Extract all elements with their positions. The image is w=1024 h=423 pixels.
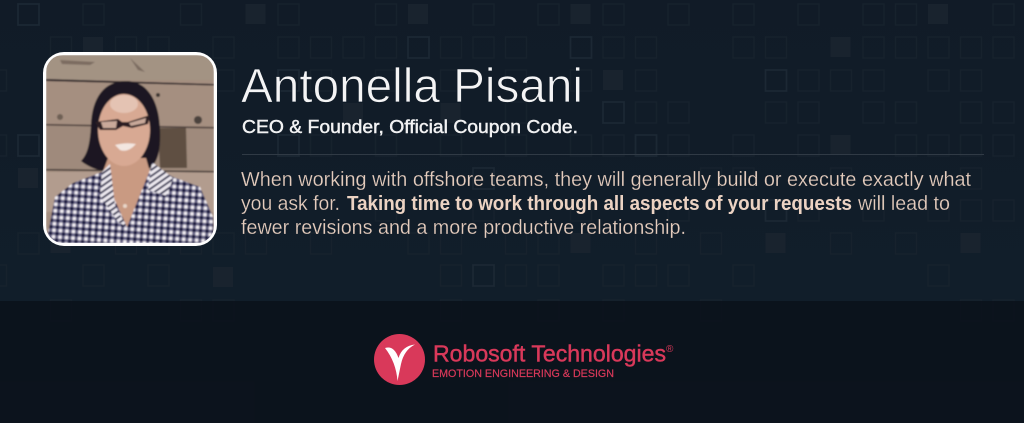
lower footer band (0, 301, 1024, 423)
portrait photo (43, 52, 217, 246)
quote text block: When working with offshore teams, they will generally build or execute exactly what (241, 169, 971, 191)
quote text block: you ask for. (241, 193, 340, 215)
name heading: Antonella Pisani (241, 60, 583, 113)
tagline: EMOTION ENGINEERING & DESIGN (432, 368, 614, 380)
quote text block: Taking time to work through all aspects of your requests (347, 193, 852, 215)
job title: CEO & Founder, Official Coupon Code. (242, 117, 578, 137)
quote text block (241, 169, 971, 239)
background square pattern (0, 4, 1014, 321)
quote text block: will lead to (857, 193, 950, 215)
upper background panel (0, 0, 1024, 301)
quote text block: fewer revisions and a more productive relationship. (241, 217, 686, 239)
registered mark: ® (666, 344, 674, 355)
wordmark: Robosoft Technologies (433, 340, 666, 366)
icon: logo circle with V swoosh (374, 334, 425, 385)
Robosoft logo (374, 334, 674, 385)
divider (242, 154, 984, 155)
